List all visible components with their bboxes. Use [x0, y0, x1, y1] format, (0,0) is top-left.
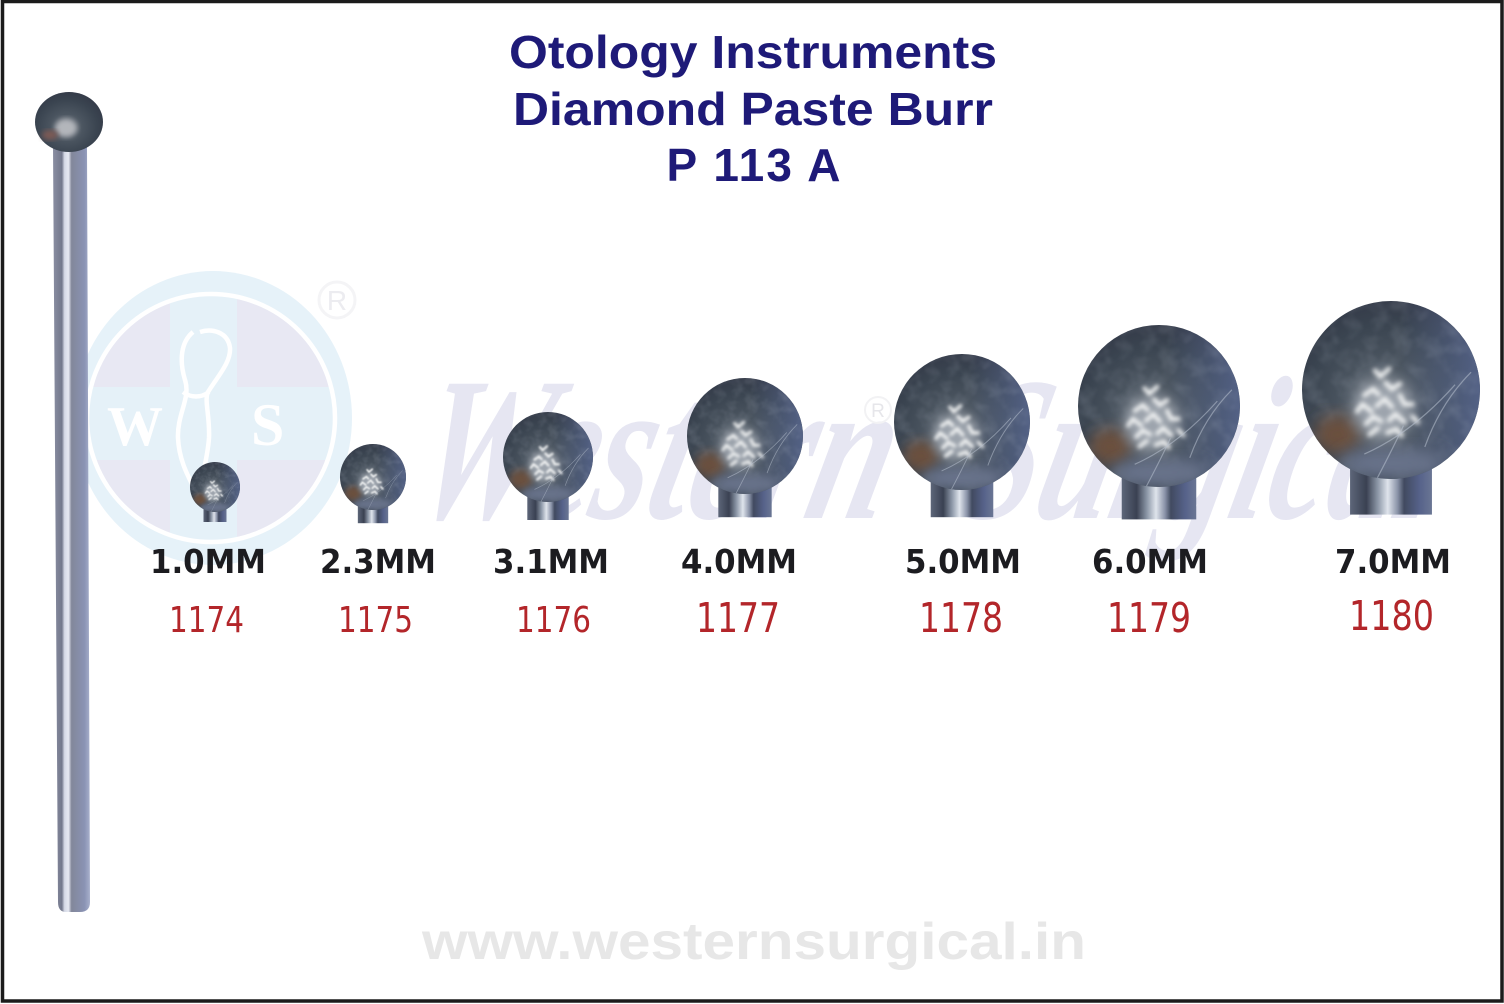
- size label 7.0MM: 7.0MM: [1335, 542, 1451, 581]
- watermark: registered mark: R: [327, 285, 347, 316]
- burr 4.0MM: [681, 378, 803, 581]
- size label 1.0MM: 1.0MM: [150, 542, 266, 581]
- title: Otology Instruments: [509, 26, 997, 78]
- code 1178: 1178: [919, 594, 1003, 642]
- size label 5.0MM: 5.0MM: [905, 542, 1021, 581]
- burr 7.0MM: [1302, 301, 1480, 581]
- watermark: WS round logo: S: [251, 392, 284, 458]
- watermark: WS round logo: W: [107, 396, 163, 458]
- title: [509, 26, 997, 191]
- watermark: registered mark on script: R: [871, 401, 885, 422]
- watermark: Western Surgical script: [394, 337, 1470, 563]
- burr 5.0MM: [894, 354, 1030, 581]
- code 1174: 1174: [169, 600, 244, 641]
- code 1180: 1180: [1349, 592, 1434, 640]
- code 1176: 1176: [516, 600, 591, 641]
- burr 2.3MM: [320, 444, 436, 581]
- size label 3.1MM: 3.1MM: [493, 542, 609, 581]
- title: Diamond Paste Burr: [513, 83, 993, 135]
- watermark: website url: www.westernsurgical.in: [421, 913, 1086, 971]
- size label 6.0MM: 6.0MM: [1092, 542, 1208, 581]
- code 1175: 1175: [338, 600, 413, 641]
- burr 6.0MM: [1078, 325, 1240, 581]
- watermark: registered mark: [319, 282, 355, 318]
- size label 2.3MM: 2.3MM: [320, 542, 436, 581]
- long burr full instrument: [35, 92, 103, 912]
- watermark: WS round logo: [74, 271, 352, 565]
- burr 3.1MM: [493, 412, 609, 581]
- code 1177: 1177: [696, 594, 780, 642]
- code 1179: 1179: [1107, 594, 1191, 642]
- title: P 113 A: [666, 139, 840, 191]
- watermark: registered mark on script: [865, 397, 891, 423]
- size label 4.0MM: 4.0MM: [681, 542, 797, 581]
- watermark: Western Surgical script: Western: [394, 337, 925, 563]
- burr 1.0MM: [150, 462, 266, 581]
